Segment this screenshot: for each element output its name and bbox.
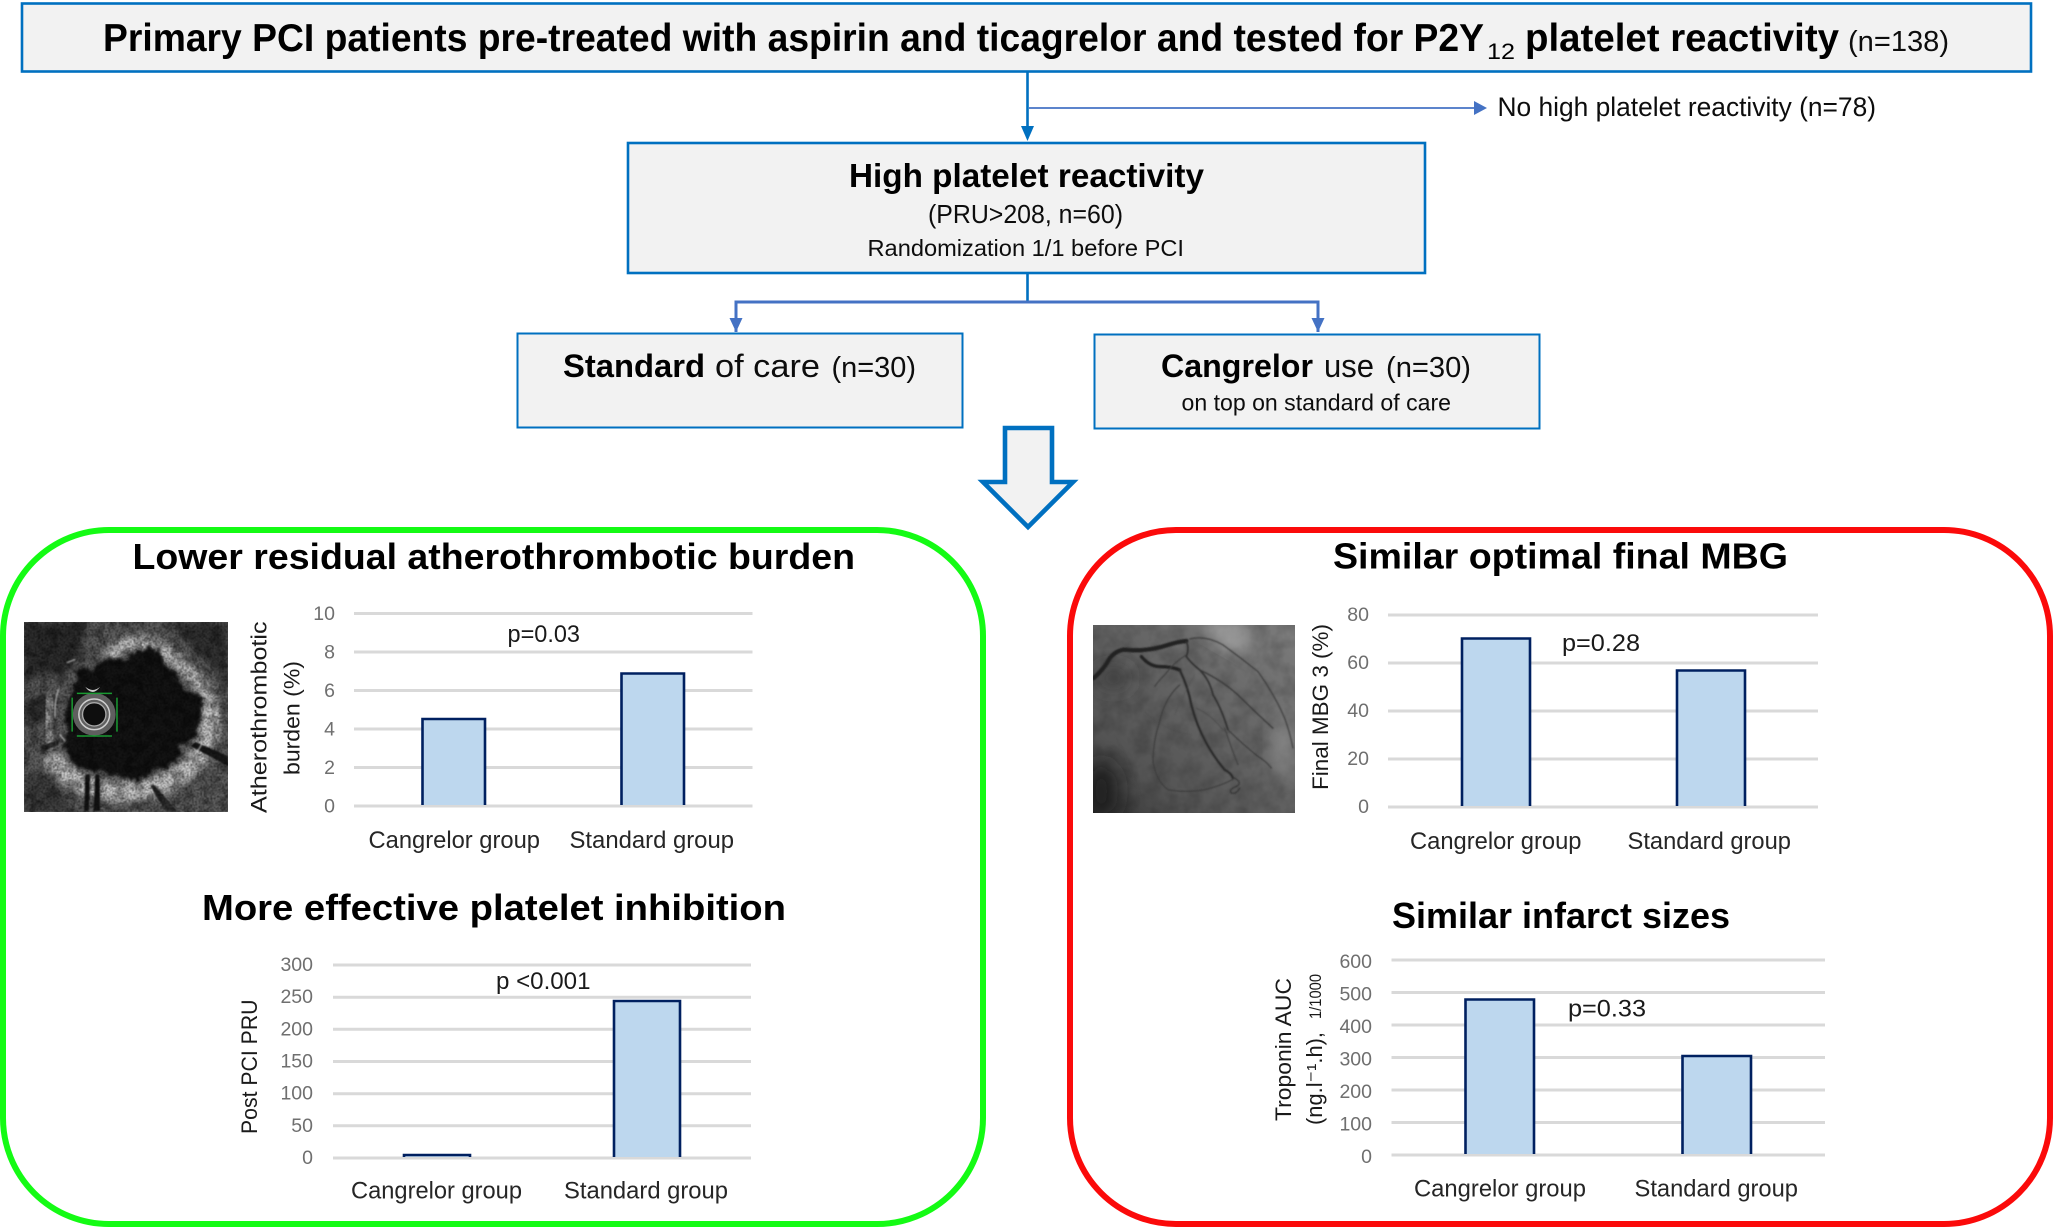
heading: lower residual atherothrombotic burden: Lower residual atherothrombotic burden [132, 536, 855, 577]
flow box: standard of care: of care [715, 348, 820, 384]
y axis ticks: 80 [1347, 604, 1369, 626]
category labels [368, 827, 734, 854]
y axis title: Troponin AUC [1271, 978, 1296, 1121]
y axis ticks: 40 [1347, 700, 1369, 722]
p value: p=0.33 [1568, 996, 1646, 1022]
y axis ticks: 0 [302, 1147, 313, 1169]
flow box: cangrelor use: Cangrelor [1161, 348, 1313, 384]
y axis ticks [1339, 951, 1372, 1168]
y axis ticks: 10 [313, 603, 335, 625]
block arrow: flow to results [983, 428, 1073, 527]
flow box: cangrelor use [1094, 334, 1540, 428]
y axis ticks: 0 [1358, 796, 1369, 818]
flow box: standard of care: (n=30) [832, 352, 916, 384]
y axis ticks: 4 [324, 718, 335, 740]
y axis title: (ng.l⁻¹.h), [1302, 1032, 1327, 1125]
y axis ticks: 200 [1339, 1081, 1372, 1103]
flow box: standard of care: Standard [563, 348, 705, 384]
title: primary PCI patients: platelet reactivity [1525, 17, 1840, 60]
y axis ticks [313, 603, 335, 818]
category labels: Standard group [1634, 1176, 1798, 1202]
y axis ticks [280, 954, 313, 1169]
image: coronary angiogram [1093, 625, 1295, 813]
flow box: cangrelor use: (n=30) [1386, 352, 1471, 384]
y axis ticks: 6 [324, 680, 335, 702]
bar: standard group [1682, 1056, 1751, 1154]
heading: more effective platelet inhibition: More effective platelet inhibition [202, 887, 786, 928]
category labels: Standard group [570, 827, 734, 854]
y axis title: Final MBG 3 (%) [1308, 624, 1333, 790]
flow box: high platelet reactivity [628, 143, 1425, 273]
panel: red results [1070, 530, 2050, 1224]
flow box: cangrelor use: use [1324, 348, 1374, 384]
bar: cangrelor group [404, 1155, 470, 1157]
bar: cangrelor group [1466, 1000, 1534, 1154]
y axis ticks: 300 [1339, 1048, 1372, 1070]
category labels: Cangrelor group [368, 827, 540, 854]
category labels: Cangrelor group [1410, 828, 1582, 855]
heading: similar optimal final MBG: Similar optimal final MBG [1333, 536, 1788, 576]
bar: standard group [614, 1001, 680, 1157]
y axis ticks: 2 [324, 757, 335, 779]
title: primary PCI patients: Primary PCI patients pre-treated with aspirin and ticagrelor and tested for P2Y [103, 17, 1484, 60]
y axis title [1271, 974, 1327, 1125]
y axis ticks: 500 [1339, 984, 1372, 1006]
y axis ticks: 100 [280, 1083, 313, 1105]
flow box: enrolled patients [22, 4, 2031, 72]
category labels: Cangrelor group [1414, 1176, 1586, 1202]
arrows: randomization branches [730, 273, 1324, 332]
chart: post PCI PRU [237, 954, 751, 1204]
y axis ticks: 400 [1339, 1016, 1372, 1038]
heading: similar infarct sizes: Similar infarct sizes [1392, 895, 1730, 936]
category labels [1414, 1176, 1798, 1202]
category labels: Standard group [564, 1178, 728, 1204]
chart: final MBG 3 [1308, 604, 1818, 855]
p value: p=0.03 [508, 621, 580, 648]
y axis ticks: 0 [324, 796, 335, 818]
panel: green results [3, 530, 983, 1224]
y axis ticks: 200 [280, 1018, 313, 1040]
chart: troponin AUC [1271, 951, 1825, 1202]
flow box: high platelet reactivity: Randomization 1/1 before PCI [868, 235, 1184, 261]
y axis ticks [1347, 604, 1369, 818]
text: no high platelet reactivity: No high platelet reactivity (n=78) [1498, 92, 1876, 122]
y axis ticks: 300 [280, 954, 313, 976]
chart: atherothrombotic burden [246, 603, 752, 854]
arrow: no high platelet reactivity branch [1029, 101, 1487, 115]
title: primary PCI patients: 12 [1487, 39, 1515, 64]
bar: cangrelor group [422, 719, 485, 805]
y axis ticks: 100 [1339, 1114, 1372, 1136]
flow box: cangrelor use: on top on standard of care [1182, 390, 1451, 416]
category labels: Standard group [1628, 828, 1791, 855]
y axis title: Atherothrombotic [246, 621, 272, 813]
category labels: Cangrelor group [351, 1178, 522, 1204]
category labels [351, 1178, 728, 1204]
y axis title [246, 621, 304, 813]
p value: p=0.28 [1562, 630, 1640, 657]
y axis ticks: 0 [1361, 1146, 1372, 1168]
y axis ticks: 600 [1339, 951, 1372, 973]
y axis title: 1/1000 [1306, 974, 1325, 1019]
bar: cangrelor group [1462, 638, 1530, 806]
flow box: standard of care [518, 334, 962, 428]
image: OCT cross-section [24, 622, 228, 812]
y axis title: burden (%) [280, 661, 304, 775]
flow box: high platelet reactivity: High platelet reactivity [849, 158, 1204, 195]
flow box: high platelet reactivity: (PRU>208, n=60) [928, 201, 1123, 229]
p value: p <0.001 [496, 968, 590, 995]
bar: standard group [622, 674, 684, 805]
bar: standard group [1677, 670, 1745, 806]
y axis ticks: 150 [280, 1050, 313, 1072]
y axis ticks: 60 [1347, 652, 1369, 674]
y axis title: Post PCI PRU [237, 1000, 262, 1134]
title: primary PCI patients: (n=138) [1848, 26, 1949, 58]
y axis ticks: 250 [280, 986, 313, 1008]
y axis ticks: 20 [1347, 748, 1369, 770]
y axis ticks: 50 [291, 1115, 313, 1137]
category labels [1410, 828, 1791, 855]
y axis ticks: 8 [324, 642, 335, 664]
arrow: enrolled to high platelet reactivity [1021, 72, 1034, 141]
